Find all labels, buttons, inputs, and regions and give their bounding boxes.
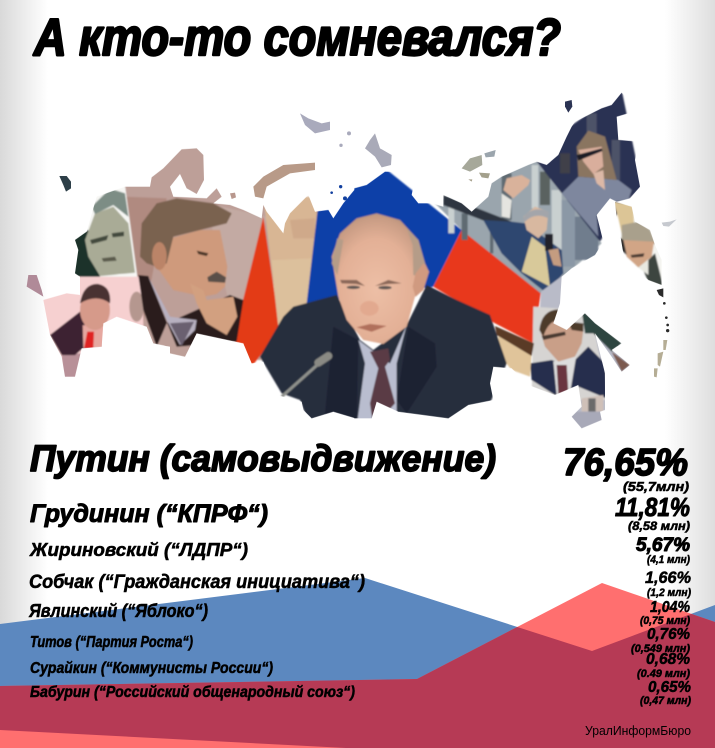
row: Titov result: (0,549 млн) [631, 643, 690, 655]
map of Russia with candidates [27, 90, 677, 430]
soft photographic collage [40, 90, 663, 430]
row: Baburin name: Бабурин (“Российский общенародный союз“) [30, 684, 355, 701]
row: Putin name: Путин (самовыдвижение) [30, 438, 496, 479]
panel: Grudinin figure [138, 198, 243, 347]
blue wave [0, 578, 715, 748]
Putin suit [260, 285, 507, 427]
panel: Titov [530, 275, 630, 430]
panel: Chinese-style red flag [233, 217, 280, 367]
Putin head [332, 213, 429, 344]
panel: Grudinin background [123, 147, 273, 360]
row: Baburin result: (0,47 млн) [640, 695, 691, 707]
panel: Yavlinsky [70, 183, 137, 277]
row: Titov result: 0,76% [647, 626, 690, 643]
row: Yavlinsky result: (0,75 млн) [640, 615, 690, 627]
islands [27, 100, 677, 377]
row: Grudinin name: Грудинин (“КПРФ“) [30, 500, 268, 528]
clipped map content [40, 90, 663, 430]
row: Suraikin result: (0.49 млн) [637, 668, 690, 680]
Putin hair sides [332, 228, 425, 276]
row: Putin result: (55,7млн) [623, 479, 689, 494]
panel: beige hall [263, 197, 322, 327]
title: А кто-то сомневался? [32, 9, 561, 67]
row: Suraikin name: Сурайкин (“Коммунисты России“) [30, 660, 273, 677]
row: Zhirinovsky result: (4,1 млн) [647, 554, 690, 566]
row: Zhirinovsky name: Жириновский (“ЛДПР“) [29, 540, 248, 560]
panel: Russian flag red [433, 230, 541, 343]
row: Suraikin result: 0,68% [646, 651, 690, 668]
row: Suraikin result [637, 651, 690, 680]
row: Grudinin result: (8,58 млн) [628, 519, 690, 533]
panel: Zhirinovsky [435, 162, 602, 297]
Putin shirt [357, 325, 407, 427]
panel: chair [495, 326, 534, 377]
overlap wave [0, 614, 715, 748]
source credit: УралИнформБюро [585, 723, 691, 738]
panel: Yushchenko [44, 275, 144, 377]
microphone [282, 356, 328, 397]
row: Sobchak name: Собчак (“Гражданская инициатива“) [29, 572, 365, 593]
Putin lapels [325, 327, 358, 427]
Putin tie [370, 348, 395, 427]
Putin brows and eyes [340, 280, 402, 289]
row: Baburin result: 0,65% [648, 679, 691, 696]
panel: Sobchak [537, 90, 642, 242]
row: Grudinin result [615, 492, 690, 533]
Putin nose and mouth [357, 301, 387, 332]
row: Yavlinsky result: 1,04% [650, 599, 690, 616]
panel: Putin [260, 213, 507, 427]
row: Zhirinovsky result [636, 535, 690, 566]
row: Baburin result [640, 679, 691, 707]
row: Sobchak result: 1,66% [645, 568, 691, 587]
row: Yavlinsky result [640, 599, 690, 627]
panel: Baburin [615, 201, 662, 285]
row: Grudinin result: 11,81% [615, 492, 690, 522]
row: Titov result [631, 626, 690, 655]
Putin ear and shade [413, 263, 429, 297]
row: Sobchak result: (1,2 млн) [647, 587, 691, 599]
row: Putin result: 76,65% [563, 442, 688, 484]
row: Zhirinovsky result: 5,67% [636, 535, 690, 556]
row: Titov name: Титов (“Партия Роста“) [30, 634, 193, 651]
row: Yavlinsky name: Явлинский (“Яблоко“) [28, 601, 208, 621]
candidate list [28, 438, 691, 707]
row: Sobchak result [645, 568, 691, 599]
coral wave [0, 583, 715, 748]
panel: Russian flag blue [307, 168, 462, 303]
